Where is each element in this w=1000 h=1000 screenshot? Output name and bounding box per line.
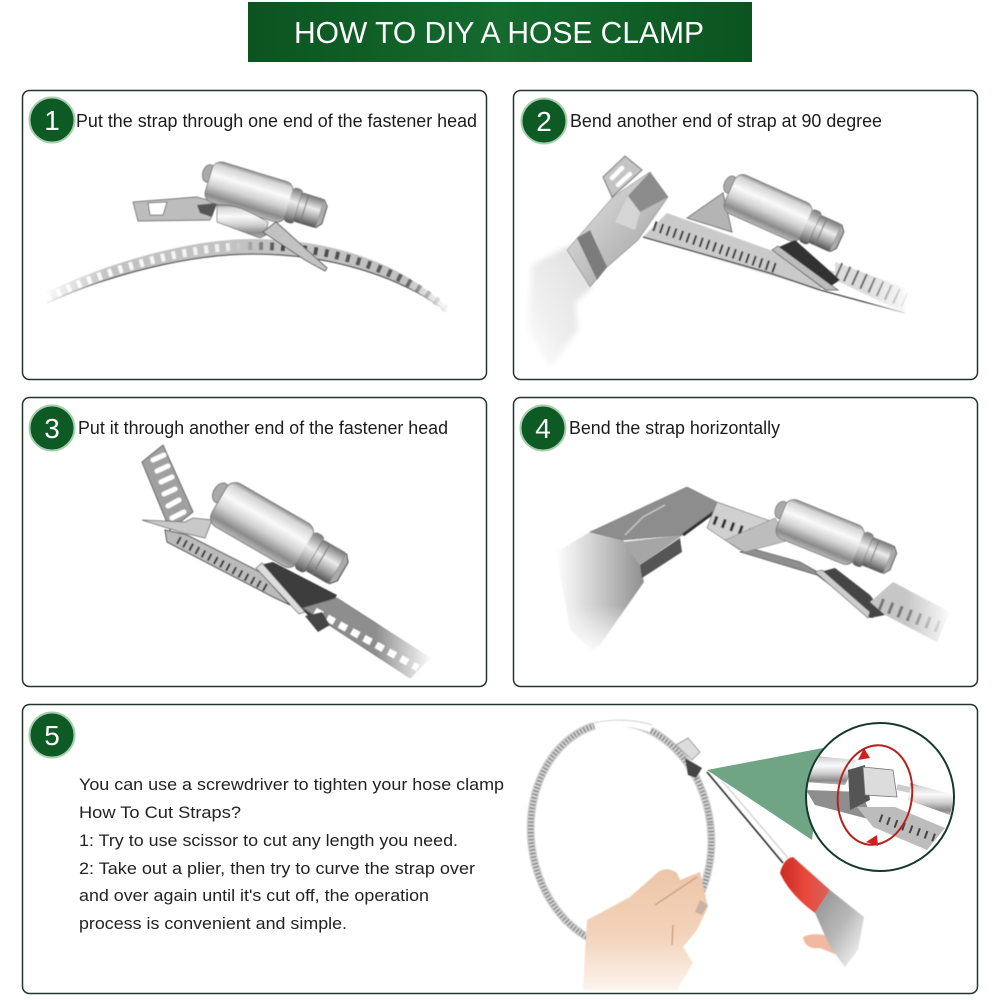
title banner (248, 2, 752, 62)
step 4 instruction: Bend the strap horizontally (569, 418, 780, 438)
illustration: pliers bending strap (528, 156, 913, 368)
step 5 instructions: process is convenient and simple. (79, 914, 347, 933)
step 1 number badge (30, 98, 74, 142)
step 5 instructions: You can use a screwdriver to tighten your hose clamp (79, 775, 504, 794)
green zoom cone (707, 748, 823, 840)
step 1 instruction: Put the strap through one end of the fastener head (76, 111, 477, 131)
step 5 instructions: How To Cut Straps? (79, 803, 241, 822)
title banner: HOW TO DIY A HOSE CLAMP (294, 15, 704, 50)
step 1 number badge: 1 (44, 105, 60, 136)
step 4 number badge: 4 (535, 413, 551, 444)
step 4 number badge (520, 406, 566, 450)
panel: step 4 (514, 398, 978, 686)
step 3 number badge: 3 (44, 413, 60, 444)
panel: step 3 (22, 398, 486, 686)
panel: step 1 (22, 90, 486, 380)
step 2 number badge: 2 (536, 106, 552, 137)
magnified detail with rotation arrows (805, 723, 955, 871)
step 2 number badge (522, 98, 566, 144)
step 5 number badge: 5 (44, 720, 60, 751)
step 2 instruction: Bend another end of strap at 90 degree (570, 111, 882, 131)
step 5 instructions (79, 775, 504, 933)
panel: step 5 (22, 704, 978, 994)
step 5 number badge (30, 712, 74, 758)
illustration: ring clamp held by hand (518, 712, 724, 990)
illustration: screwdriver (707, 770, 864, 967)
illustration: pliers flattening strap (556, 487, 953, 655)
step 5 instructions: and over again until it's cut off, the operation (79, 886, 429, 905)
illustration: clamp threaded on strap (40, 157, 450, 320)
step 3 instruction: Put it through another end of the fastener head (78, 418, 448, 438)
illustration: strap folded through head (142, 445, 433, 684)
panel: step 2 (514, 90, 978, 380)
step 5 instructions: 1: Try to use scissor to cut any length you need. (79, 831, 458, 850)
step 5 instructions: 2: Take out a plier, then try to curve the strap over (79, 859, 475, 878)
step 3 number badge (30, 406, 74, 450)
